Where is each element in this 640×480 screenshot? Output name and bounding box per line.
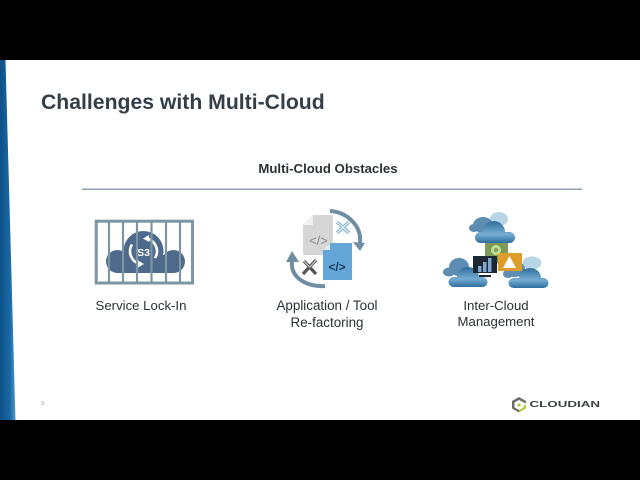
icon: application refactoring: </> — [309, 233, 328, 248]
heading: Multi-Cloud Obstacles: Multi-Cloud Obstacles — [258, 161, 398, 176]
label: Application / Tool Re-factoring: Application / Tool — [276, 298, 378, 313]
icon: inter-cloud management — [443, 212, 548, 288]
icon: cloud in cage: S3 — [137, 247, 150, 259]
label: Application / Tool Re-factoring: Re-factoring — [291, 315, 363, 330]
slide background — [0, 60, 640, 420]
logo: Cloudian: CLOUDIAN — [530, 399, 600, 409]
label: Inter-Cloud Management: Inter-Cloud — [463, 298, 529, 313]
icon: cloud in cage — [96, 221, 192, 283]
label: Inter-Cloud Management: Management — [458, 314, 535, 329]
page number: 3 — [41, 401, 44, 407]
icon: application refactoring: </> — [328, 260, 346, 274]
divider rule — [82, 188, 582, 190]
left accent band — [0, 60, 16, 420]
logo: Cloudian — [512, 397, 600, 412]
label: Service Lock-In: Service Lock-In — [96, 298, 186, 313]
title: Challenges with Multi-Cloud — [41, 91, 325, 114]
icon: application refactoring — [286, 211, 365, 286]
